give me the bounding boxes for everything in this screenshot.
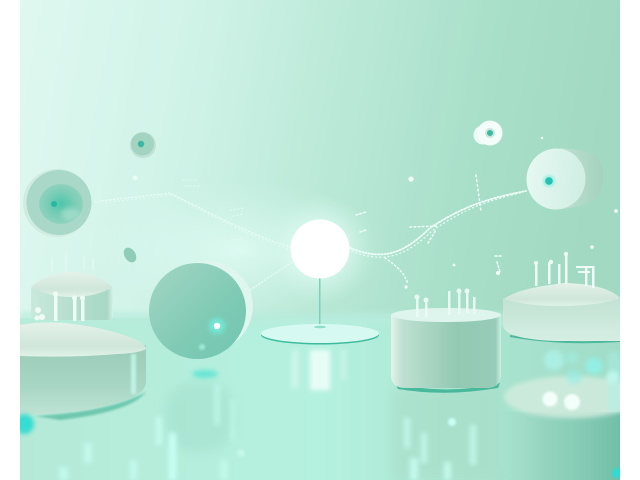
device: small right ring bbox=[474, 120, 502, 146]
central glowing hub on stand bbox=[261, 220, 379, 344]
device: front left pedestal bbox=[20, 322, 146, 420]
device: large tilted disc bbox=[149, 261, 253, 359]
hub glow bbox=[288, 209, 362, 290]
device: back left pedestal bbox=[31, 272, 113, 321]
icon: antenna pins bbox=[534, 252, 594, 288]
faint pins above back left pedestal bbox=[83, 256, 94, 270]
device reflection: right pedestal bbox=[504, 376, 640, 418]
device: center pedestal bbox=[391, 288, 501, 393]
cyan glow under large disc bbox=[192, 370, 218, 378]
background wall bbox=[20, 0, 620, 330]
reflected light streaks bbox=[59, 385, 476, 480]
device: tiny pill bbox=[124, 248, 136, 262]
bokeh lights bbox=[14, 350, 622, 478]
floor bbox=[20, 312, 620, 480]
device: right cylinder bbox=[526, 148, 593, 210]
icon: antenna pins bbox=[414, 288, 476, 317]
floor reflection under hub bbox=[292, 350, 346, 390]
dotted network line: right bbox=[350, 175, 526, 284]
small particles bbox=[132, 137, 618, 289]
dotted network line: left bbox=[95, 180, 292, 290]
device: left dish bbox=[23, 169, 92, 237]
device: small left disc bbox=[130, 132, 156, 158]
icon: antenna pins bbox=[34, 292, 85, 321]
device: right pedestal bbox=[503, 252, 620, 342]
